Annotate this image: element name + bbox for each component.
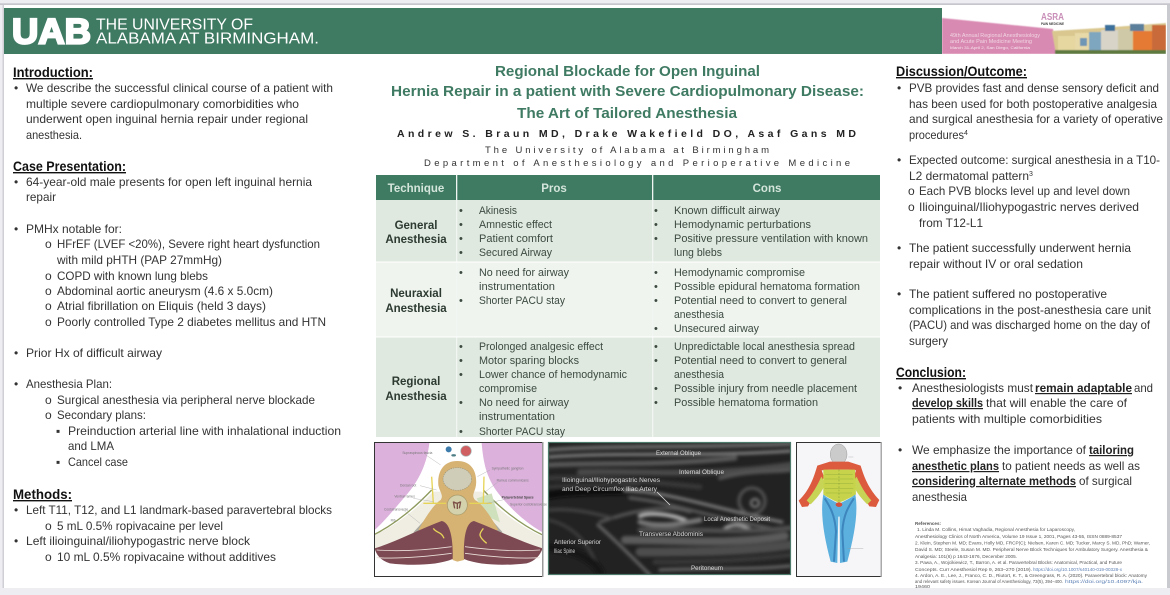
section: case presentation: •: [14, 346, 18, 360]
row: regional anesthesia: Possible injury from needle placement: [674, 383, 857, 395]
anatomy illustration: paravertebral cross-section: Sympathetic ganglion: [492, 466, 524, 470]
table header: Pros: [541, 183, 567, 195]
row: regional anesthesia: Unpredictable local anesthesia spread: [674, 341, 855, 353]
section: conclusion: and: [1134, 381, 1153, 395]
row: regional anesthesia: Shorter PACU stay: [479, 426, 565, 438]
section: methods: [13, 486, 332, 564]
row: general anesthesia: Amnestic effect: [479, 219, 552, 231]
section: case presentation: Cancel case: [68, 455, 128, 469]
section: conclusion: remain adaptable: [1035, 381, 1132, 395]
center title block: Hernia Repair in a patient with Severe Cardiopulmonary Disease:: [391, 84, 864, 100]
section: discussion and outcome: o: [908, 184, 915, 198]
row: regional anesthesia: instrumentation: [479, 411, 555, 423]
ultrasound image: [548, 442, 791, 575]
section: case presentation: ▪: [56, 424, 60, 438]
references: Concepts. Curr Anesthesiol Rep 9, 263–270 (2019).: [915, 567, 1032, 572]
row: regional anesthesia: •: [459, 426, 463, 438]
section: discussion and outcome: (PACU) and was discharged home on the day of: [909, 318, 1151, 332]
row: general anesthesia: Anesthesia: [385, 234, 447, 246]
section: conclusion: of surgical: [1079, 474, 1132, 488]
section: case presentation: o: [45, 237, 52, 251]
section: case presentation: Preinduction arterial line with inhalational induction: [68, 424, 341, 438]
row: general anesthesia: Akinesis: [479, 205, 517, 217]
section: discussion and outcome: The patient successfully underwent hernia: [909, 241, 1131, 255]
section: case presentation: PMHx notable for:: [26, 222, 122, 236]
section: case presentation: o: [45, 315, 52, 329]
ultrasound labels: Ilioinguinal/Iliohypogastric Nerves: [562, 477, 661, 484]
center title block: Regional Blockade for Open Inguinal: [495, 64, 760, 80]
row: regional anesthesia: Lower chance of hemodynamic: [479, 369, 627, 381]
section: discussion and outcome: •: [897, 241, 901, 255]
row: general anesthesia: General: [395, 220, 437, 232]
section: case presentation: and LMA: [68, 439, 114, 453]
row: regional anesthesia: anesthesia: [674, 369, 725, 381]
row: neuraxial anesthesia: Unsecured airway: [674, 323, 759, 335]
row: neuraxial anesthesia: Potential need to convert to general: [674, 295, 847, 307]
section: discussion and outcome: [896, 63, 1163, 348]
references: 1. Linda M. Collins, Himat Vaghadia, Regional Anesthesia for Laparoscopy,: [917, 527, 1075, 532]
section: methods: •: [14, 503, 18, 517]
authors: Andrew S. Braun MD, Drake Wakefield DO, Asaf Gans MD: [397, 128, 856, 140]
references: Anesthesiology Clinics of North America, Volume 19 Issue 1, 2001, Pages 43-55, ISSN 0889-8537: [915, 534, 1122, 539]
section: case presentation: [13, 158, 341, 469]
references: David S. MD; Steele, Susan M. MD. Peripheral Nerve Block Techniques for Ambulatory Surgery. Anesthesia &: [915, 547, 1148, 552]
row: neuraxial anesthesia: Anesthesia: [385, 303, 447, 315]
ultrasound labels: External Oblique: [656, 450, 701, 457]
section: discussion and outcome: •: [897, 287, 901, 301]
row: general anesthesia: Secured Airway: [479, 247, 552, 259]
arrow: to nerve: [657, 492, 670, 505]
row: general anesthesia: Known difficult airway: [674, 205, 780, 217]
affiliation: [424, 145, 850, 169]
comparison table: [376, 175, 880, 438]
section: discussion and outcome: complications in the post-anesthesia care unit: [909, 303, 1152, 317]
references: References:: [915, 521, 941, 526]
row: general anesthesia: •: [459, 205, 463, 217]
section: discussion and outcome: 3: [1029, 171, 1033, 178]
table header: Cons: [753, 183, 781, 195]
ultrasound labels: Peritoneum: [691, 565, 723, 572]
UAB logo: THE UNIVERSITY OF: [96, 16, 253, 34]
row: neuraxial anesthesia: No need for airway: [479, 267, 569, 279]
row: regional anesthesia: Anesthesia: [385, 391, 447, 403]
row: general anesthesia: •: [459, 219, 463, 231]
right column: [896, 63, 1163, 589]
row: neuraxial anesthesia: [376, 262, 880, 337]
row: regional anesthesia: [376, 337, 880, 438]
row: general anesthesia: Positive pressure ventilation with known: [674, 233, 868, 245]
references: https://doi.org/10.4097/kja.: [1065, 579, 1143, 584]
section: case presentation: o: [45, 284, 52, 298]
section: methods: 10 mL 0.5% ropivacaine without additives: [57, 550, 276, 564]
anatomy illustration: paravertebral cross-section: Dorsal root: [400, 484, 416, 488]
row: regional anesthesia: •: [459, 355, 463, 367]
ultrasound labels: and Deep Circumflex Iliac Artery: [562, 486, 658, 493]
references: Analgesia: 101(6) p 1643-1676, December 2005.: [915, 554, 1017, 559]
row: regional anesthesia: •: [654, 397, 658, 409]
left column: [13, 64, 341, 564]
UAB logo: UAB: [12, 12, 91, 52]
section: methods: o: [45, 519, 52, 533]
row: neuraxial anesthesia: •: [654, 323, 658, 335]
row: regional anesthesia: •: [654, 355, 658, 367]
references: and relevant safety issues. Korean Journal of Anesthesiology, 73(5), 394–400.: [915, 579, 1063, 584]
row: regional anesthesia: Regional: [392, 376, 440, 388]
section: introduction: multiple severe cardiopulmonary comorbidities who: [26, 97, 299, 111]
row: regional anesthesia: Motor sparing blocks: [479, 355, 579, 367]
section: discussion and outcome: Each PVB blocks level up and level down: [919, 184, 1130, 198]
section: conclusion: Conclusion:: [896, 364, 966, 380]
row: neuraxial anesthesia: •: [654, 281, 658, 293]
references: 3. Pawa, A., Wojcikiewicz, T., Barron, A. et al. Paravertebral Blocks: Anatomical, Practical, and Future: [915, 560, 1122, 565]
ultrasound labels: Anterior Superior: [554, 539, 602, 546]
section: discussion and outcome: L2 dermatomal pattern: [909, 169, 1029, 183]
row: regional anesthesia: •: [459, 397, 463, 409]
anatomy illustration: paravertebral cross-section: Costotransverse: [384, 507, 408, 511]
section: conclusion: to patient needs as well as: [1002, 459, 1140, 473]
section: conclusion: anesthetic plans: [912, 459, 999, 473]
ultrasound labels: Local Anesthetic Deposit: [704, 516, 770, 523]
row: general anesthesia: •: [654, 233, 658, 245]
section: discussion and outcome: •: [897, 153, 901, 167]
section: case presentation: o: [45, 299, 52, 313]
row: neuraxial anesthesia: Neuraxial: [390, 288, 442, 300]
section: case presentation: Anesthesia Plan:: [26, 377, 112, 391]
row: neuraxial anesthesia: •: [654, 295, 658, 307]
row: regional anesthesia: •: [654, 341, 658, 353]
row: regional anesthesia: Prolonged analgesic effect: [479, 341, 603, 353]
section: conclusion: [896, 364, 1153, 504]
UAB logo: [12, 12, 319, 52]
section: case presentation: HFrEF (LVEF <20%), Severe right heart dysfunction: [57, 237, 320, 251]
references: [915, 521, 1150, 589]
section: methods: Left T11, T12, and L1 landmark-based paravertebral blocks: [26, 503, 332, 517]
anatomy illustration: paravertebral cross-section: Paravertebral Space: [502, 495, 534, 499]
row: general anesthesia: [376, 200, 880, 262]
section: methods: o: [45, 550, 52, 564]
section: conclusion: •: [898, 443, 902, 457]
section: case presentation: •: [14, 222, 18, 236]
section: discussion and outcome: surgery: [909, 334, 948, 348]
section: introduction: Introduction:: [13, 64, 93, 80]
ultrasound labels: [554, 450, 770, 572]
center title block: [391, 64, 864, 169]
row: neuraxial anesthesia: Hemodynamic compromise: [674, 267, 805, 279]
row: regional anesthesia: •: [459, 369, 463, 381]
row: neuraxial anesthesia: Shorter PACU stay: [479, 295, 565, 307]
conference banner: and Acute Pain Medicine Meeting: [950, 39, 1032, 45]
section: conclusion: Anesthesiologists must: [912, 381, 1034, 395]
ultrasound labels: Transverse Abdominis: [639, 531, 704, 538]
ultrasound labels: Internal Oblique: [679, 469, 724, 476]
anatomy illustration: paravertebral cross-section: Ventral ramus: [394, 495, 415, 499]
conference banner: 49th Annual Regional Anesthesiology: [950, 33, 1040, 39]
header banner: [4, 8, 1166, 54]
UAB logo: ALABAMA AT BIRMINGHAM.: [96, 30, 319, 48]
ultrasound labels: Iliac Spine: [554, 548, 575, 555]
row: neuraxial anesthesia: instrumentation: [479, 281, 555, 293]
conference banner: [942, 13, 1166, 54]
section: discussion and outcome: PVB provides fast and dense sensory deficit and: [909, 81, 1159, 95]
conference banner: March 31-April 2, San Diego, California: [950, 46, 1030, 50]
row: general anesthesia: Patient comfort: [479, 233, 553, 245]
section: case presentation: Abdominal aortic aneurysm (4.6 x 5.0cm): [57, 284, 273, 298]
row: general anesthesia: Hemodynamic perturbations: [674, 219, 811, 231]
row: general anesthesia: •: [459, 247, 463, 259]
section: case presentation: COPD with known lung blebs: [57, 269, 208, 283]
row: neuraxial anesthesia: Possible epidural hematoma formation: [674, 281, 860, 293]
section: introduction: We describe the successful clinical course of a patient with: [26, 81, 333, 95]
section: case presentation: with mild pHTH (PAP 27mmHg): [56, 253, 222, 267]
anatomy illustration: paravertebral cross-section: Supraspinous fascia: [402, 451, 432, 455]
section: conclusion: considering alternate methods: [912, 474, 1076, 488]
section: case presentation: •: [14, 175, 18, 189]
row: regional anesthesia: •: [654, 383, 658, 395]
section: case presentation: o: [45, 393, 52, 407]
affiliation: The University of Alabama at Birmingham: [485, 145, 769, 156]
section: conclusion: •: [898, 381, 902, 395]
section: discussion and outcome: and surgical anesthesia for a variety of operative: [909, 112, 1163, 126]
section: methods: Left ilioinguinal/iliohypogastric nerve block: [26, 534, 251, 548]
section: case presentation: Surgical anesthesia via peripheral nerve blockade: [57, 393, 315, 407]
section: discussion and outcome: procedures: [909, 128, 964, 142]
section: case presentation: o: [45, 408, 52, 422]
anatomy illustration: paravertebral cross-section: Superior costotransverse: [510, 503, 547, 507]
section: introduction: underwent open inguinal hernia repair under regional: [26, 112, 308, 126]
section: introduction: [13, 64, 333, 142]
references: https://doi.org/10.1007/s40140-019-00328-x: [1033, 567, 1123, 572]
anatomy illustration: paravertebral cross-section: [374, 442, 547, 577]
anatomy illustration: paravertebral cross-section: Ramus communicans: [497, 479, 529, 483]
center title block: The Art of Tailored Anesthesia: [517, 106, 738, 122]
section: discussion and outcome: has been used for both postoperative analgesia: [909, 97, 1157, 111]
section: case presentation: 64-year-old male presents for open left inguinal hernia: [26, 175, 312, 189]
row: general anesthesia: lung blebs: [674, 247, 722, 259]
row: neuraxial anesthesia: •: [654, 267, 658, 279]
row: neuraxial anesthesia: •: [459, 295, 463, 307]
section: introduction: •: [14, 81, 18, 95]
section: methods: •: [14, 534, 18, 548]
anatomy illustration: paravertebral cross-section: Rib: [391, 519, 396, 523]
section: discussion and outcome: Ilioinguinal/Iliohypogastric nerves derived: [919, 200, 1139, 214]
row: general anesthesia: •: [654, 205, 658, 217]
row: regional anesthesia: •: [459, 341, 463, 353]
section: case presentation: Atrial fibrillation on Eliquis (held 3 days): [57, 299, 266, 313]
conference banner: ASRA: [1041, 12, 1064, 23]
section: discussion and outcome: Discussion/Outcome:: [896, 63, 1027, 79]
section: introduction: anesthesia.: [26, 128, 82, 142]
section: case presentation: Poorly controlled Type 2 diabetes mellitus and HTN: [57, 315, 326, 329]
section: methods: Methods:: [13, 486, 72, 502]
section: discussion and outcome: 4: [964, 130, 968, 137]
references: 4. Ardon, A. E., Lee, J., Franco, C. D., Riutort, K. T., & Greengrass, R. A. (2020). Paravertebral block: Anatomy: [915, 573, 1148, 578]
row: regional anesthesia: No need for airway: [479, 397, 569, 409]
section: case presentation: Secondary plans:: [57, 408, 146, 422]
section: discussion and outcome: The patient suffered no postoperative: [909, 287, 1107, 301]
row: general anesthesia: •: [654, 219, 658, 231]
conference banner: PAIN MEDICINE: [1041, 22, 1065, 26]
table header: Technique: [388, 183, 444, 195]
section: conclusion: tailoring: [1089, 443, 1134, 457]
references: 2. Klein, Stephen M. MD; Evans, Holly MD, FRCP(C); Nielsen, Karen C. MD; Tucker, Marcy S. MD, PhD; Warner,: [915, 540, 1150, 546]
section: conclusion: that will enable the care of: [986, 396, 1128, 410]
dermatome body figure: [796, 442, 882, 577]
row: general anesthesia: •: [459, 233, 463, 245]
section: conclusion: patients with multiple comorbidities: [912, 412, 1102, 426]
section: case presentation: repair: [26, 190, 56, 204]
section: conclusion: anesthesia: [912, 490, 967, 504]
section: conclusion: develop skills: [912, 396, 983, 410]
section: case presentation: •: [14, 377, 18, 391]
section: conclusion: We emphasize the importance of: [912, 443, 1087, 457]
section: methods: 5 mL 0.5% ropivacaine per level: [57, 519, 223, 533]
section: discussion and outcome: from T12-L1: [919, 216, 983, 230]
section: case presentation: ▪: [56, 455, 60, 469]
section: discussion and outcome: Expected outcome: surgical anesthesia in a T10-: [909, 153, 1160, 167]
section: discussion and outcome: o: [908, 200, 915, 214]
row: regional anesthesia: Possible hematoma formation: [674, 397, 818, 409]
section: case presentation: Prior Hx of difficult airway: [26, 346, 162, 360]
section: case presentation: o: [45, 269, 52, 283]
row: regional anesthesia: compromise: [479, 383, 537, 395]
row: neuraxial anesthesia: •: [459, 267, 463, 279]
section: discussion and outcome: repair without IV or oral sedation: [909, 257, 1083, 271]
section: discussion and outcome: •: [897, 81, 901, 95]
section: case presentation: Case Presentation:: [13, 158, 126, 174]
row: neuraxial anesthesia: anesthesia: [674, 309, 725, 321]
row: regional anesthesia: Potential need to convert to general: [674, 355, 847, 367]
references: 19460: [915, 584, 931, 589]
table header: [376, 175, 880, 200]
affiliation: Department of Anesthesiology and Perioperative Medicine: [424, 158, 850, 169]
